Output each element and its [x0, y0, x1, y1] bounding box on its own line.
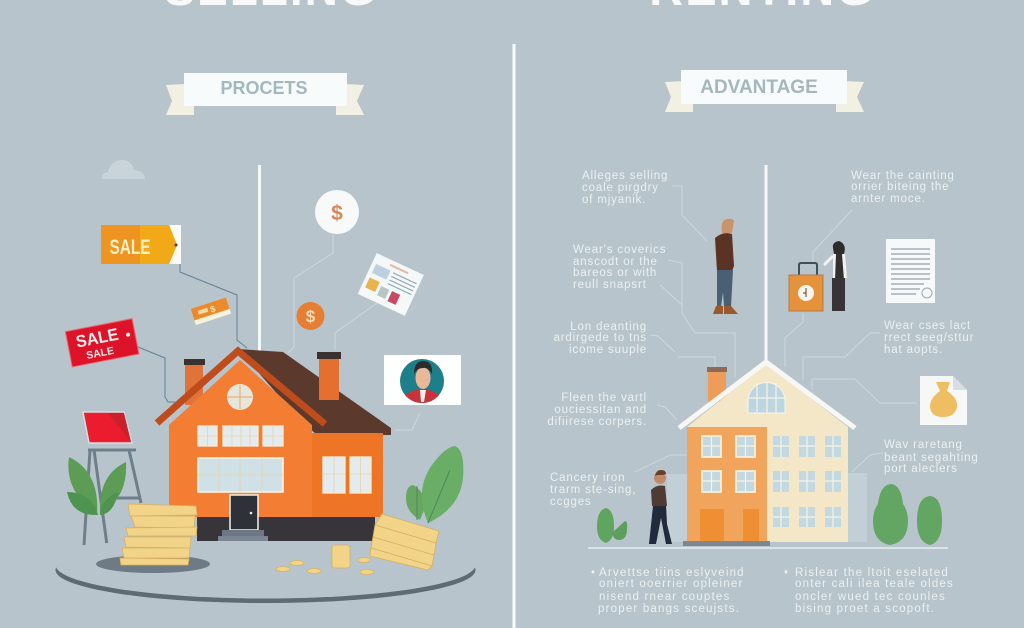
- ribbon: advantage: [665, 70, 864, 112]
- chimney right: [317, 352, 341, 400]
- text: note 8: port aleclers: [884, 463, 958, 475]
- chimney left: [184, 359, 205, 405]
- tag: sale red: [65, 319, 139, 367]
- text: note 2: anscodt or the: [573, 256, 658, 268]
- icon: document tilted: [358, 253, 424, 316]
- connector lines: renting: [635, 186, 917, 472]
- cream wing windows: [773, 436, 841, 527]
- text: note 1: of mjyanik.: [582, 194, 646, 206]
- gable cream: [687, 364, 848, 542]
- icon: dollar white circle: $: [331, 202, 343, 225]
- text: note 3: icome suuple: [569, 344, 647, 356]
- tag: small discount: [191, 297, 231, 325]
- text: note 8: beant segahting: [884, 452, 979, 464]
- orange wing windows: [702, 436, 755, 492]
- text: note 7: rrect seeg/sttur: [884, 332, 974, 344]
- text: note 1: Alleges selling: [582, 170, 668, 182]
- icon: document right: [886, 239, 935, 303]
- vertical line: selling: [258, 165, 261, 353]
- icon: dollar white circle: [315, 190, 359, 234]
- figure: man with folder: [649, 470, 672, 544]
- house: selling: [157, 349, 391, 541]
- wood stack right: [370, 514, 439, 570]
- tag: sale red: SALE: [85, 345, 115, 362]
- tag: sale red: SALE: [74, 325, 120, 352]
- large window: [198, 458, 283, 492]
- text: bullet left: Arvettse tiins eslyveind: [599, 567, 745, 579]
- walls: [169, 360, 312, 517]
- text: note 3: Lon deanting: [570, 321, 647, 333]
- house: renting: [667, 362, 867, 546]
- icon: dollar orange circle: [296, 302, 324, 330]
- arched window: [748, 382, 785, 413]
- side windows: [323, 457, 371, 493]
- text: bullet right: onter cali ilea teale oldes: [795, 578, 954, 590]
- ribbon: advantage: ADVANTAGE: [700, 77, 818, 98]
- text: note 1: coale pirgdry: [582, 182, 659, 194]
- roof: [679, 362, 855, 428]
- center divider: [512, 44, 516, 628]
- figure: man standing: [713, 219, 738, 314]
- vertical line: renting: [764, 165, 768, 363]
- roof brown: [238, 349, 391, 435]
- icon: portrait card: [384, 355, 461, 405]
- text: bullet right: •: [784, 567, 789, 579]
- text: note 5: Cancery iron: [550, 472, 625, 484]
- text: note 2: bareos or with: [573, 267, 657, 279]
- foundation: [197, 517, 375, 541]
- text: bullet right: bising proet a scopoft.: [795, 603, 935, 615]
- icon: dollar orange circle: $: [306, 307, 316, 326]
- text: bullet right: oncler wued tec counles: [795, 591, 946, 603]
- tag: small discount: $: [209, 304, 217, 315]
- platform: [56, 532, 476, 603]
- text: note 7: Wear cses lact: [884, 320, 971, 332]
- foundation: [683, 541, 770, 546]
- coin stack left: [120, 504, 197, 565]
- text: note 6: orrier biteing the: [851, 181, 949, 193]
- tag: sale orange: SALE: [110, 236, 150, 259]
- text: note 3: ardirgede to tns: [553, 332, 647, 344]
- text: note 2: reull snapsrt: [573, 279, 647, 291]
- text: note 4: ouciessitan and: [554, 404, 647, 416]
- connector lines: selling: [138, 235, 420, 430]
- orange wing: [687, 427, 767, 542]
- text: bullet right: Rislear the ltoit eselated: [795, 567, 949, 579]
- text: note 6: arnter moce.: [851, 193, 926, 205]
- text: note 6: Wear the cainting: [851, 170, 955, 182]
- text: note 2: Wear's coverics: [573, 244, 666, 256]
- round window: [227, 384, 253, 410]
- roof eave: [157, 351, 325, 424]
- side shade: [667, 473, 867, 542]
- ribbon: procets: PROCETS: [220, 78, 308, 98]
- icon: plant right: [406, 446, 463, 523]
- text: bullet left: proper bangs sceujsts.: [598, 603, 740, 615]
- text: bullet left: •: [591, 567, 596, 579]
- icon: plant left: [67, 457, 126, 515]
- text: bullet left: oniert ooerrier opleiner: [599, 578, 744, 590]
- upper windows: [198, 426, 283, 446]
- steps: [218, 530, 268, 541]
- ground line: [588, 547, 948, 549]
- text: note 4: difiirese corpers.: [547, 416, 647, 428]
- text: note 5: trarm ste-sing,: [550, 484, 636, 496]
- figure: woman with orange cart: [789, 241, 847, 311]
- icon: red billboard stand: [83, 412, 141, 545]
- orange doors: [700, 509, 759, 541]
- text: note 8: Wav raretang: [884, 439, 963, 451]
- ribbon: procets: [166, 73, 364, 115]
- icon: money bag document: [920, 376, 967, 425]
- text: note 7: hat aopts.: [884, 344, 943, 356]
- trees: renting: [597, 484, 942, 545]
- text: note 5: ccgges: [550, 496, 592, 508]
- text: note 4: Fleen the vartl: [561, 392, 647, 404]
- chimney: [707, 367, 727, 402]
- tag: sale orange: [101, 225, 181, 264]
- door: [230, 495, 258, 530]
- icon: cloud: [102, 160, 145, 179]
- coins scattered: [276, 545, 374, 574]
- text: bullet left: nisend rnear couptes: [599, 591, 730, 603]
